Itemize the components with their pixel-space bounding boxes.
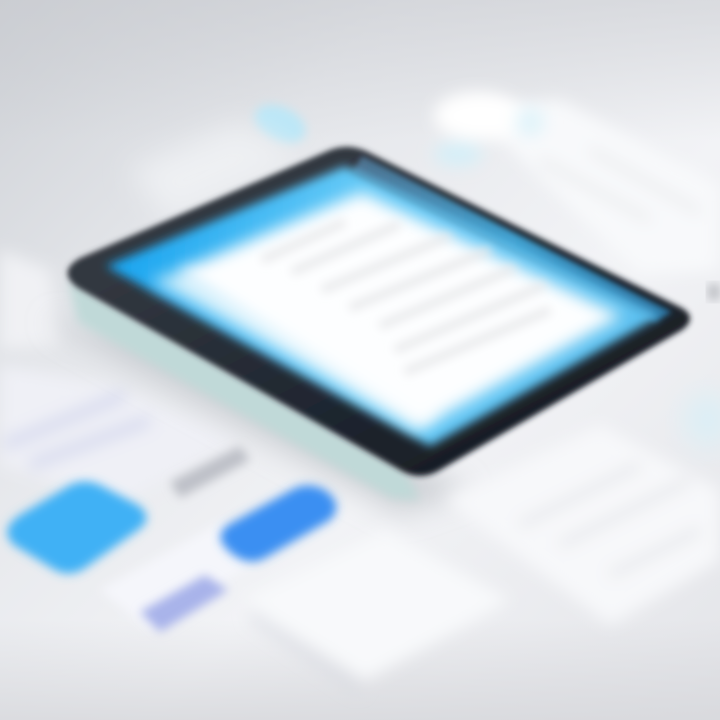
icon: cyan rounded tile (7, 482, 147, 574)
icon: grey label bar (170, 446, 250, 498)
icon: blue rounded tile (220, 485, 336, 562)
panel: left document cards (0, 250, 235, 505)
screen lower left glow (150, 270, 440, 430)
tablet white document (176, 192, 622, 428)
tablet side edge (68, 280, 420, 500)
panel: faint top left card (130, 125, 300, 220)
icon: top cyan blob (248, 97, 312, 151)
panel: bottom centre document card (245, 530, 510, 690)
shadow: beneath tablet (45, 320, 470, 515)
icon: faint right cyan blob (684, 394, 720, 446)
tablet upper right bezel tint (352, 156, 672, 322)
icon: lavender tile (140, 575, 228, 632)
document text lines (262, 222, 550, 372)
panel: top right document card (470, 100, 720, 275)
icon: right edge dark mark (708, 284, 720, 300)
panel: bottom right document card (445, 425, 720, 625)
icon: top white cloud (434, 92, 545, 166)
tablet blue screen (106, 166, 660, 446)
tablet bezel (67, 147, 690, 476)
panel: small card below blue button (100, 520, 250, 630)
tablet (67, 147, 690, 500)
